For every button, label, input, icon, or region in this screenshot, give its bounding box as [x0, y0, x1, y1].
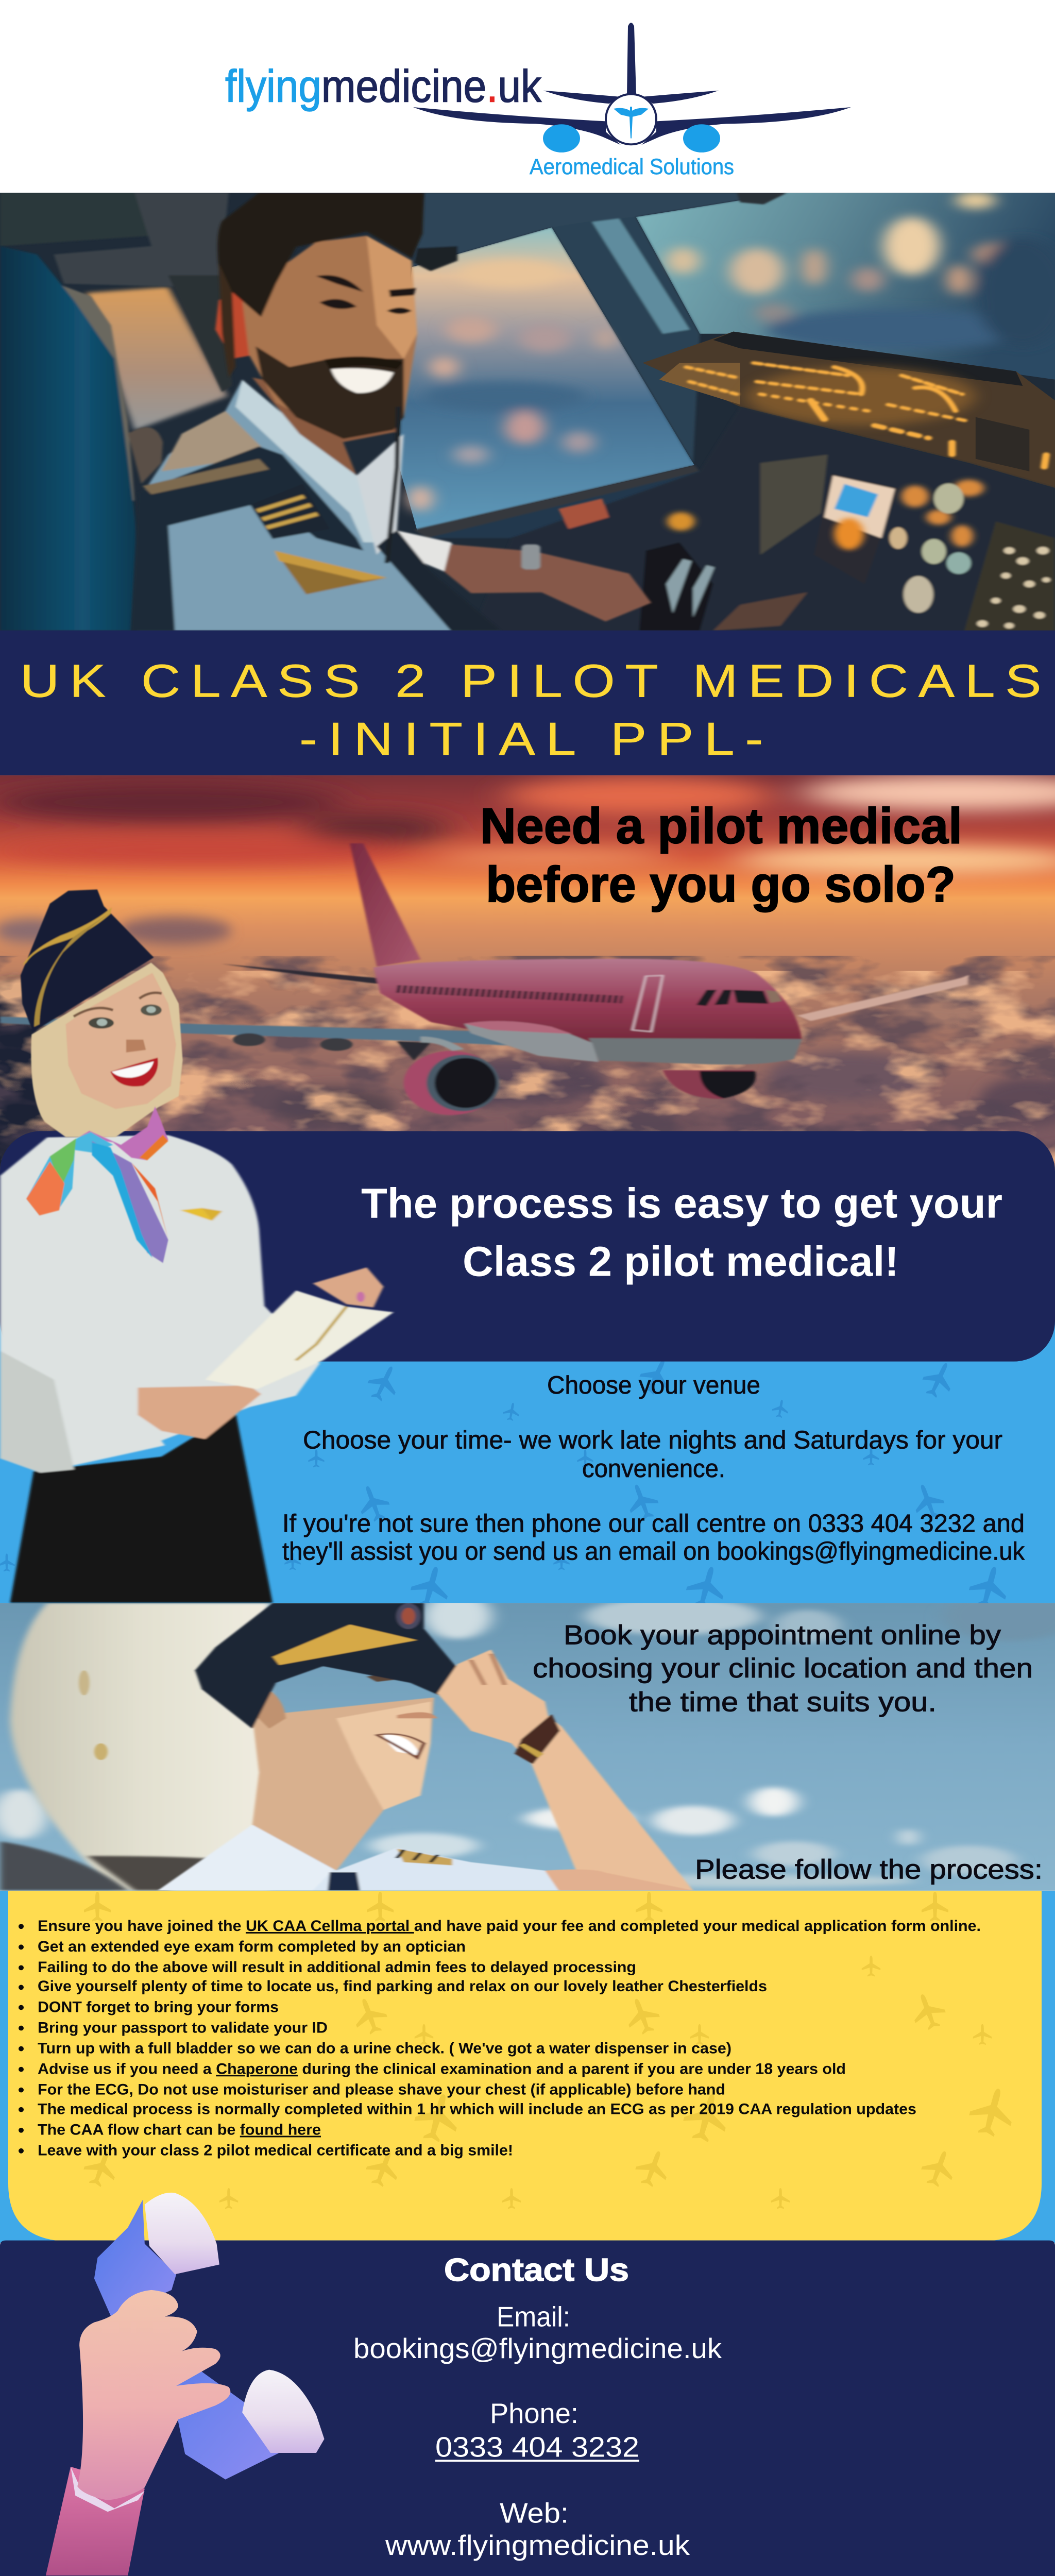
- checklist text: Leave with your class 2 pilot medical certificate and a big smile!: [38, 2142, 513, 2159]
- heading text: The process is easy to get your: [361, 1179, 1002, 1227]
- sunset sky clouds: [0, 775, 1055, 874]
- jet engine: [0, 1603, 269, 1890]
- co-pilot seat in foreground: [0, 246, 163, 631]
- logo wordmark: flyingmedicine.uk: [225, 60, 541, 111]
- logo: aeroplane mark: [413, 23, 851, 152]
- captain section text: booking: the time that suits you.: [629, 1687, 937, 1717]
- checklist text: Advise us if you need a Chaperone during the clinical examination and a parent if you are under 18 years old: [38, 2061, 846, 2077]
- sleeve: [46, 2467, 145, 2575]
- checklist bullets: [19, 1924, 24, 2154]
- panel: navy process heading: Class 2 pilot medical!: [463, 1238, 899, 1285]
- contact heading: Contact Us: [444, 2252, 629, 2288]
- captain section text: booking: [533, 1620, 1033, 1717]
- stewardess figure: [0, 889, 394, 1603]
- right cockpit window with clouds: [636, 192, 1055, 380]
- blue strip behind checklist: [0, 1891, 1055, 2243]
- lower cloud layer: [0, 917, 1055, 1182]
- left cockpit window: [86, 287, 227, 431]
- checklist text: DONT forget to bring your forms: [38, 1999, 279, 2015]
- sunset headline: [480, 798, 962, 912]
- email details: Email:: [497, 2301, 570, 2332]
- telephone handle and mouthpiece: [138, 2323, 279, 2480]
- instrument panel with screens: [471, 406, 1055, 634]
- icon: hand holding telephone: [46, 2193, 325, 2575]
- checklist text: Give yourself plenty of time to locate us, find parking and relax on our lovely leather Chesterfields: [38, 1978, 767, 1995]
- airliner: [0, 843, 969, 1115]
- checklist text: Get an extended eye exam form completed by an optician: [38, 1938, 466, 1955]
- glareshield with orange switch lights: [642, 332, 1055, 488]
- checklist text: Failing to do the above will result in additional admin fees to delayed processing: [38, 1959, 636, 1976]
- process prompt: Please follow the process:: [695, 1855, 1043, 1885]
- panel: navy process heading: [0, 1131, 1055, 1362]
- web details: www.flyingmedicine.uk: [385, 2530, 690, 2561]
- captain section text: booking: choosing your clinic location and then: [533, 1653, 1033, 1684]
- process steps text: convenience.: [582, 1455, 725, 1483]
- hand: [77, 2290, 230, 2500]
- process steps text: If you're not sure then phone our call centre on 0333 404 3232 and: [282, 1510, 1025, 1538]
- phone details: [435, 2398, 639, 2463]
- title line 1: UK CLASS 2 PILOT MEDICALS: [20, 655, 1042, 707]
- title band: [0, 631, 1055, 775]
- cloud texture: [0, 956, 1055, 1177]
- captain figure: [158, 1603, 693, 1890]
- cockpit frame: [0, 193, 787, 538]
- photo: smiling pilot in cockpit: [0, 192, 1055, 635]
- checklist text: Ensure you have joined the UK CAA Cellma portal and have paid your fee and completed your medical application form online.: [38, 1918, 981, 1935]
- head, hat, hair and scarf: [21, 889, 183, 1263]
- process steps text: they'll assist you or send us an email on bookings@flyingmedicine.uk: [282, 1537, 1025, 1565]
- pilot figure: [131, 193, 651, 631]
- panel: contact us: [0, 2241, 1055, 2576]
- email details: [353, 2301, 722, 2364]
- checklist text: The CAA flow chart can be found here: [38, 2122, 321, 2138]
- web details: Web:: [500, 2497, 569, 2529]
- process steps text: Choose your time- we work late nights and Saturdays for your: [303, 1426, 1002, 1454]
- phone details: Phone:: [490, 2398, 578, 2429]
- sunset headline: before you go solo?: [486, 856, 956, 912]
- photo: captain shielding his eyes: [0, 1591, 1055, 1891]
- sunset headline: Need a pilot medical: [480, 798, 962, 854]
- web details: [385, 2497, 690, 2561]
- panel: yellow checklist: [8, 1891, 1042, 2241]
- checklist text: Turn up with a full bladder so we can do a urine check. ( We've got a water dispenser in case): [38, 2040, 731, 2057]
- checklist text: [38, 1918, 981, 2159]
- email details: bookings@flyingmedicine.uk: [353, 2333, 722, 2364]
- aeroplane pattern: [0, 1354, 1013, 1612]
- checklist text: Bring your passport to validate your ID: [38, 2020, 328, 2036]
- logo: flyingmedicine.uk Aeromedical Solutions: [225, 23, 851, 179]
- photo: airliner at sunset: [0, 775, 1055, 1182]
- title line 2: -INITIAL PPL-: [299, 713, 763, 765]
- checklist text: The medical process is normally completed within 1 hr which will include an ECG as per 2019 CAA regulation updates: [38, 2101, 916, 2117]
- phone details: 0333 404 3232: [435, 2431, 639, 2463]
- body: shirt, skirt, hands and ticket: [0, 1135, 394, 1603]
- captain section text: booking: Book your appointment online by: [564, 1620, 1001, 1650]
- checklist text: For the ECG, Do not use moisturiser and please shave your chest (if applicable) before hand: [38, 2081, 725, 2098]
- process steps text: Choose your venue: [547, 1371, 760, 1399]
- telephone earpiece top: [94, 2200, 176, 2316]
- process steps text: [282, 1371, 1025, 1565]
- logo tagline: Aeromedical Solutions: [530, 155, 734, 179]
- aeroplane pattern: [80, 1892, 1019, 2209]
- centre cockpit window with clouds: [397, 227, 694, 531]
- blue patterned process background: [0, 1308, 1055, 1612]
- sky clouds: [0, 1591, 1055, 1887]
